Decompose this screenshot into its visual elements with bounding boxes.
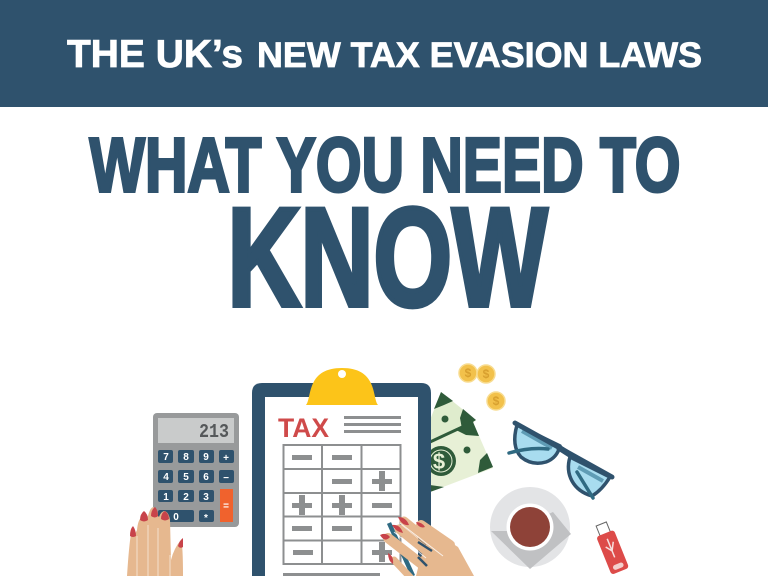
icon: calculator: + [223,453,229,464]
tax table [283,445,400,576]
icon: calculator: 0 [173,512,179,523]
main heading [90,122,680,336]
icon: calculator: 3 [203,492,209,503]
icon: left hand [127,507,183,576]
icon: right hand with pen [380,517,474,576]
dollar sign: $ [433,449,445,474]
calculator display: 213 [199,421,229,443]
icon: calculator [153,413,239,527]
icon: calculator: 7 [163,452,169,463]
main heading: KNOW [228,178,548,336]
icon: calculator: 4 [163,472,169,483]
icon: gold coins [459,364,505,410]
banner title: THE UK’s [67,33,243,76]
panel: clipboard [252,368,431,576]
banner title [67,33,702,76]
icon: gold coins: $ [483,367,490,381]
icon: calculator: * [204,513,208,524]
icon: calculator: = [223,501,229,512]
icon: glasses [509,423,612,498]
icon: calculator: 5 [183,472,189,483]
icon: calculator: 6 [203,472,209,483]
TAX label: TAX [278,413,329,443]
icon: calculator: 9 [203,452,209,463]
header banner [0,0,768,107]
icon: calculator: 2 [183,492,189,503]
icon: money notes [426,392,493,492]
icon: gold coins: $ [465,366,472,380]
icon: coffee cup [490,487,571,569]
icon: gold coins: $ [493,394,500,408]
icon: calculator: 8 [183,452,189,463]
icon: calculator: 1 [163,492,169,503]
clipboard clip [306,368,378,405]
banner title: NEW TAX EVASION LAWS [257,36,702,75]
icon: USB drive [592,520,629,575]
pen [389,523,413,576]
icon: calculator: − [223,473,229,484]
